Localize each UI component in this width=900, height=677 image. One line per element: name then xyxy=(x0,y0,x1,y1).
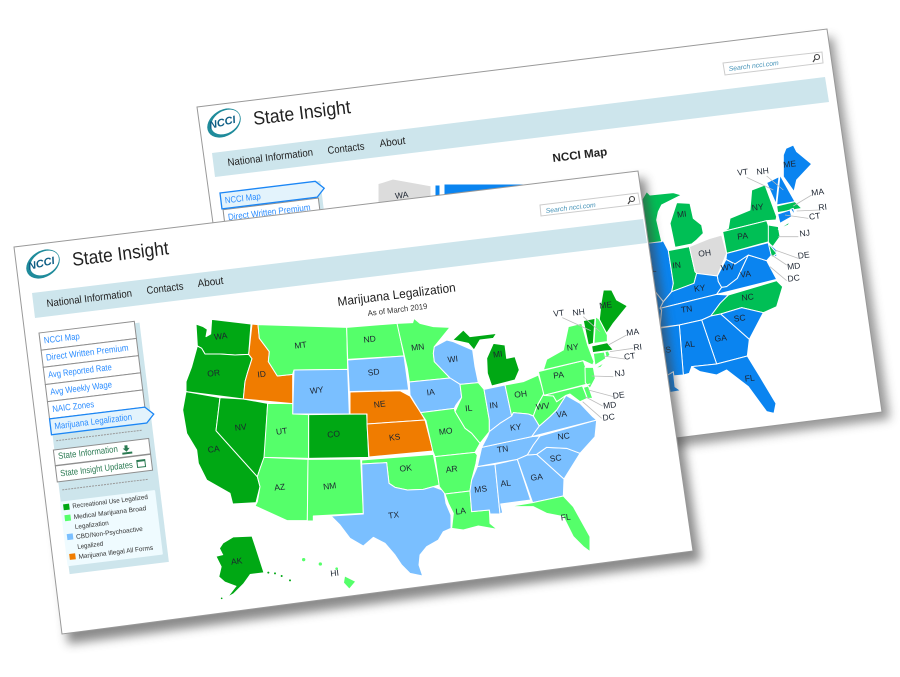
state labels front: ID xyxy=(257,369,266,380)
back search box xyxy=(723,52,823,75)
back map: states east xyxy=(633,145,819,413)
back logo: NCCI xyxy=(208,113,238,132)
map heading: As of March 2019 xyxy=(367,302,428,318)
state insight updates button xyxy=(55,454,153,482)
back map state labels: RI xyxy=(818,202,827,213)
state labels front: IN xyxy=(489,400,498,411)
state labels front: KY xyxy=(509,421,522,433)
state insight updates button: State Insight Updates xyxy=(60,460,134,478)
state labels front: WV xyxy=(535,400,550,412)
state labels front: OK xyxy=(399,462,413,474)
back map state labels: MS xyxy=(658,344,672,356)
back nav band: National Information xyxy=(227,147,314,169)
Hawaii xyxy=(302,558,355,588)
state labels front: AL xyxy=(500,477,512,489)
state labels front: MD xyxy=(602,399,617,411)
state information button: State Information xyxy=(58,444,118,461)
back map state labels: CT xyxy=(808,210,821,222)
state labels front: MO xyxy=(438,425,453,437)
back map state labels: DE xyxy=(797,249,810,261)
state labels front: OH xyxy=(514,388,528,400)
state labels front: ND xyxy=(363,333,376,345)
back title: State Insight xyxy=(252,97,353,130)
state labels front: TN xyxy=(496,443,509,455)
panel: front screenshot Marijuana Legalization xyxy=(14,171,693,634)
state labels front: TX xyxy=(388,509,400,521)
back map: states west xyxy=(377,178,530,215)
back map state labels: MA xyxy=(811,186,825,198)
state labels front: MN xyxy=(410,341,425,353)
menu list: Avg Reported Rate xyxy=(48,362,112,380)
back map state labels: ME xyxy=(783,158,797,170)
menu list: NAIC Zones xyxy=(52,399,95,414)
back map state labels: SC xyxy=(733,312,746,324)
back map state labels: NH xyxy=(756,165,769,177)
state labels front: ME xyxy=(599,299,613,311)
state labels front: DC xyxy=(602,411,615,423)
back map state labels: IN xyxy=(672,260,681,271)
state labels front: IA xyxy=(426,387,436,397)
legend: Legalization xyxy=(75,520,109,531)
state labels front: VA xyxy=(556,408,568,420)
state labels front: IL xyxy=(465,403,473,413)
map heading: Marijuana Legalization xyxy=(337,281,457,309)
back map state labels: NC xyxy=(741,291,754,303)
back map state labels: AL xyxy=(684,338,696,350)
state labels front: NC xyxy=(557,430,570,442)
back panel shadow xyxy=(215,37,890,501)
state labels front: NV xyxy=(234,421,247,433)
back nav band: Contacts xyxy=(327,141,365,157)
back sidebar: NCCI Map xyxy=(224,191,261,205)
leader lines front xyxy=(562,317,633,418)
front logo: NCCI xyxy=(27,254,57,273)
divider lines xyxy=(56,430,148,490)
state labels front: MT xyxy=(294,339,307,351)
state labels front: AK xyxy=(230,555,243,567)
back map state labels: WV xyxy=(720,261,735,273)
back map state labels: VT xyxy=(737,166,749,178)
states central and south xyxy=(633,235,783,413)
state labels front: MI xyxy=(492,348,503,360)
back map state labels: MI xyxy=(676,208,687,220)
front nav band xyxy=(32,219,647,318)
US map: west states xyxy=(183,319,410,521)
menu list: NCCI Map xyxy=(43,331,80,345)
back nav band xyxy=(212,77,829,177)
legend: Legalized xyxy=(77,541,104,551)
front search box: Search ncci.com xyxy=(545,202,596,215)
menu list: Avg Weekly Wage xyxy=(50,379,112,397)
back map state labels: PA xyxy=(737,230,749,242)
state labels front xyxy=(207,299,642,579)
state labels front: PA xyxy=(553,369,565,381)
legend: Medical Marijuana Broad xyxy=(73,505,147,521)
back map label WA: WA xyxy=(394,189,409,201)
state labels front: NY xyxy=(566,341,579,353)
front nav band: National Information xyxy=(46,288,133,310)
state labels front: CT xyxy=(623,350,636,362)
menu list xyxy=(39,320,155,435)
state labels front: SC xyxy=(549,452,562,464)
US map: Texas and neighbours xyxy=(331,454,451,576)
back map state labels: FL xyxy=(744,372,755,384)
state labels front: WY xyxy=(309,384,324,396)
state labels front: WI xyxy=(447,353,458,365)
back map title: NCCI Map xyxy=(552,146,608,165)
front nav band: About xyxy=(197,275,224,290)
state labels front: UT xyxy=(275,425,288,437)
state labels front: DE xyxy=(612,389,625,401)
state labels front: HI xyxy=(330,568,339,579)
state labels front: GA xyxy=(530,471,544,483)
state labels front: MA xyxy=(626,326,640,338)
back map state labels: VA xyxy=(740,268,752,280)
back map state labels: GA xyxy=(714,332,728,344)
state labels front: RI xyxy=(633,342,642,353)
back nav band: About xyxy=(379,135,406,150)
front panel shadow xyxy=(30,178,701,644)
back map state labels: MD xyxy=(786,260,801,272)
legend: Recreational Use Legalized xyxy=(72,494,149,510)
back map state labels: NY xyxy=(751,201,764,213)
state labels front: WA xyxy=(213,330,228,342)
back map state labels: NJ xyxy=(799,227,810,239)
back logo xyxy=(202,102,246,144)
state labels front: VT xyxy=(553,307,565,319)
legend: Marijuana Illegal All Forms xyxy=(78,545,154,561)
state labels front: KS xyxy=(388,431,401,443)
Alaska xyxy=(217,537,291,599)
US map: east states xyxy=(397,290,627,552)
state labels front: CA xyxy=(207,443,220,455)
back map state labels: TN xyxy=(680,303,693,315)
back map state labels: KY xyxy=(693,282,706,294)
front title: State Insight xyxy=(71,238,171,271)
state labels front: NM xyxy=(322,480,337,492)
menu list: Marijuana Legalization xyxy=(54,412,133,431)
states north xyxy=(633,145,812,264)
state information button xyxy=(53,438,151,466)
US map: central states xyxy=(350,391,433,457)
state labels front: SD xyxy=(367,366,380,378)
back sidebar: Direct Written Premium xyxy=(227,202,311,222)
back sidebar xyxy=(220,180,331,253)
state labels front: LA xyxy=(455,505,467,517)
state labels front: CO xyxy=(327,428,341,440)
panel: back screenshot NCCI Map xyxy=(197,29,882,492)
sidebar xyxy=(39,320,172,574)
back map state labels: DC xyxy=(787,272,800,284)
state labels front: MS xyxy=(474,483,488,495)
front search box xyxy=(540,193,640,216)
leader lines xyxy=(747,176,819,281)
back search box: Search ncci.com xyxy=(728,60,779,73)
state labels front: NJ xyxy=(614,367,625,379)
back map state labels: OH xyxy=(698,247,712,259)
front logo xyxy=(21,243,65,285)
front nav band: Contacts xyxy=(146,281,184,297)
legend xyxy=(60,490,163,566)
state labels front: NE xyxy=(373,398,386,410)
state labels front: AZ xyxy=(274,481,286,493)
state labels front: AR xyxy=(445,463,458,475)
legend: CBD/Non-Psychoactive xyxy=(76,526,143,541)
state labels front: OR xyxy=(207,367,221,379)
back map state labels: IL xyxy=(649,264,657,274)
state labels front: NH xyxy=(572,306,585,318)
back map state labels xyxy=(649,158,827,384)
menu list: Direct Written Premium xyxy=(45,343,129,363)
state labels front: FL xyxy=(560,511,571,523)
